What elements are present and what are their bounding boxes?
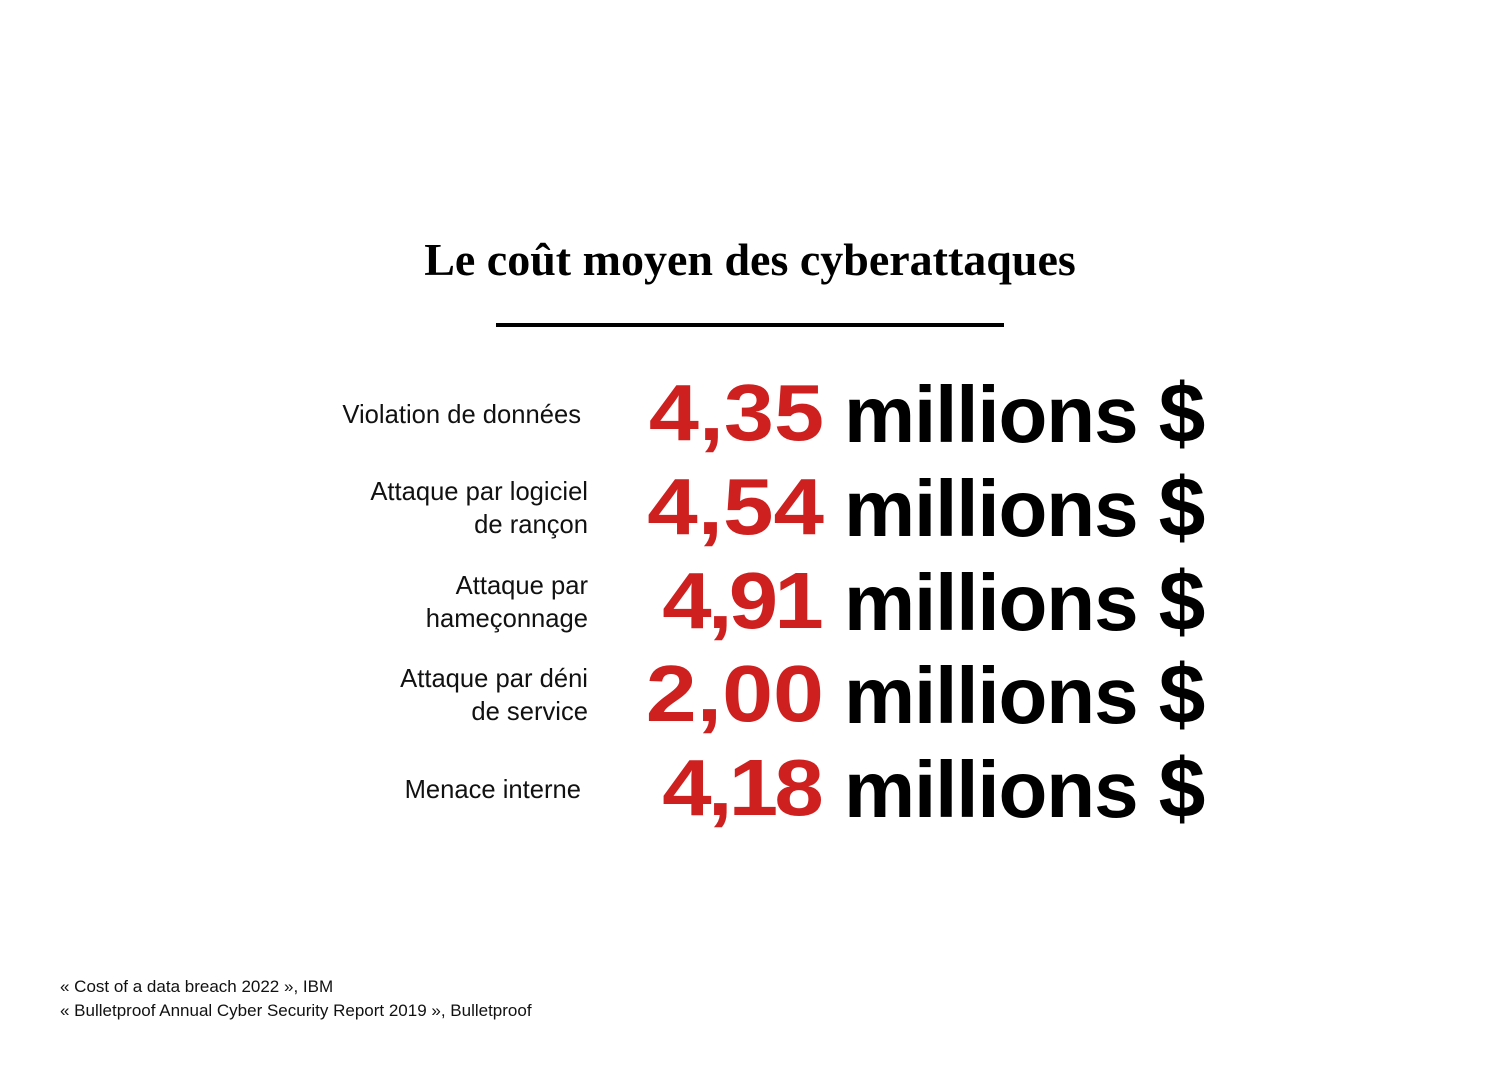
value: data breach: 4,35 <box>649 368 824 457</box>
unit: insider threat: millions $ <box>844 741 1205 835</box>
label: phishing: Attaque par <box>456 572 588 600</box>
label: phishing <box>426 572 588 633</box>
value: ransomware: 4,54 <box>647 462 824 551</box>
unit: phishing: millions $ <box>844 554 1205 648</box>
title underline <box>496 323 1004 327</box>
label: phishing: hameçonnage <box>426 605 588 633</box>
unit: data breach: millions $ <box>844 366 1205 460</box>
sources: « Bulletproof Annual Cyber Security Report 2019 », Bulletproof <box>60 1001 532 1020</box>
label: denial of service: de service <box>471 698 588 726</box>
label: ransomware: Attaque par logiciel <box>370 478 588 506</box>
label: ransomware <box>370 478 588 539</box>
unit: ransomware: millions $ <box>844 460 1205 554</box>
sources <box>60 977 532 1020</box>
value: phishing: 4,91 <box>662 556 820 645</box>
value: denial of service: 2,00 <box>646 649 824 738</box>
title: Le coût moyen des cyberattaques <box>424 234 1076 285</box>
label: denial of service <box>400 665 588 726</box>
label: denial of service: Attaque par déni <box>400 665 588 693</box>
sources: « Cost of a data breach 2022 », IBM <box>60 977 333 996</box>
value: insider threat: 4,18 <box>662 743 820 832</box>
label: ransomware: de rançon <box>474 511 588 539</box>
label: insider threat: Menace interne <box>405 776 581 804</box>
label: data breach: Violation de données <box>342 401 581 429</box>
unit: denial of service: millions $ <box>844 647 1205 741</box>
